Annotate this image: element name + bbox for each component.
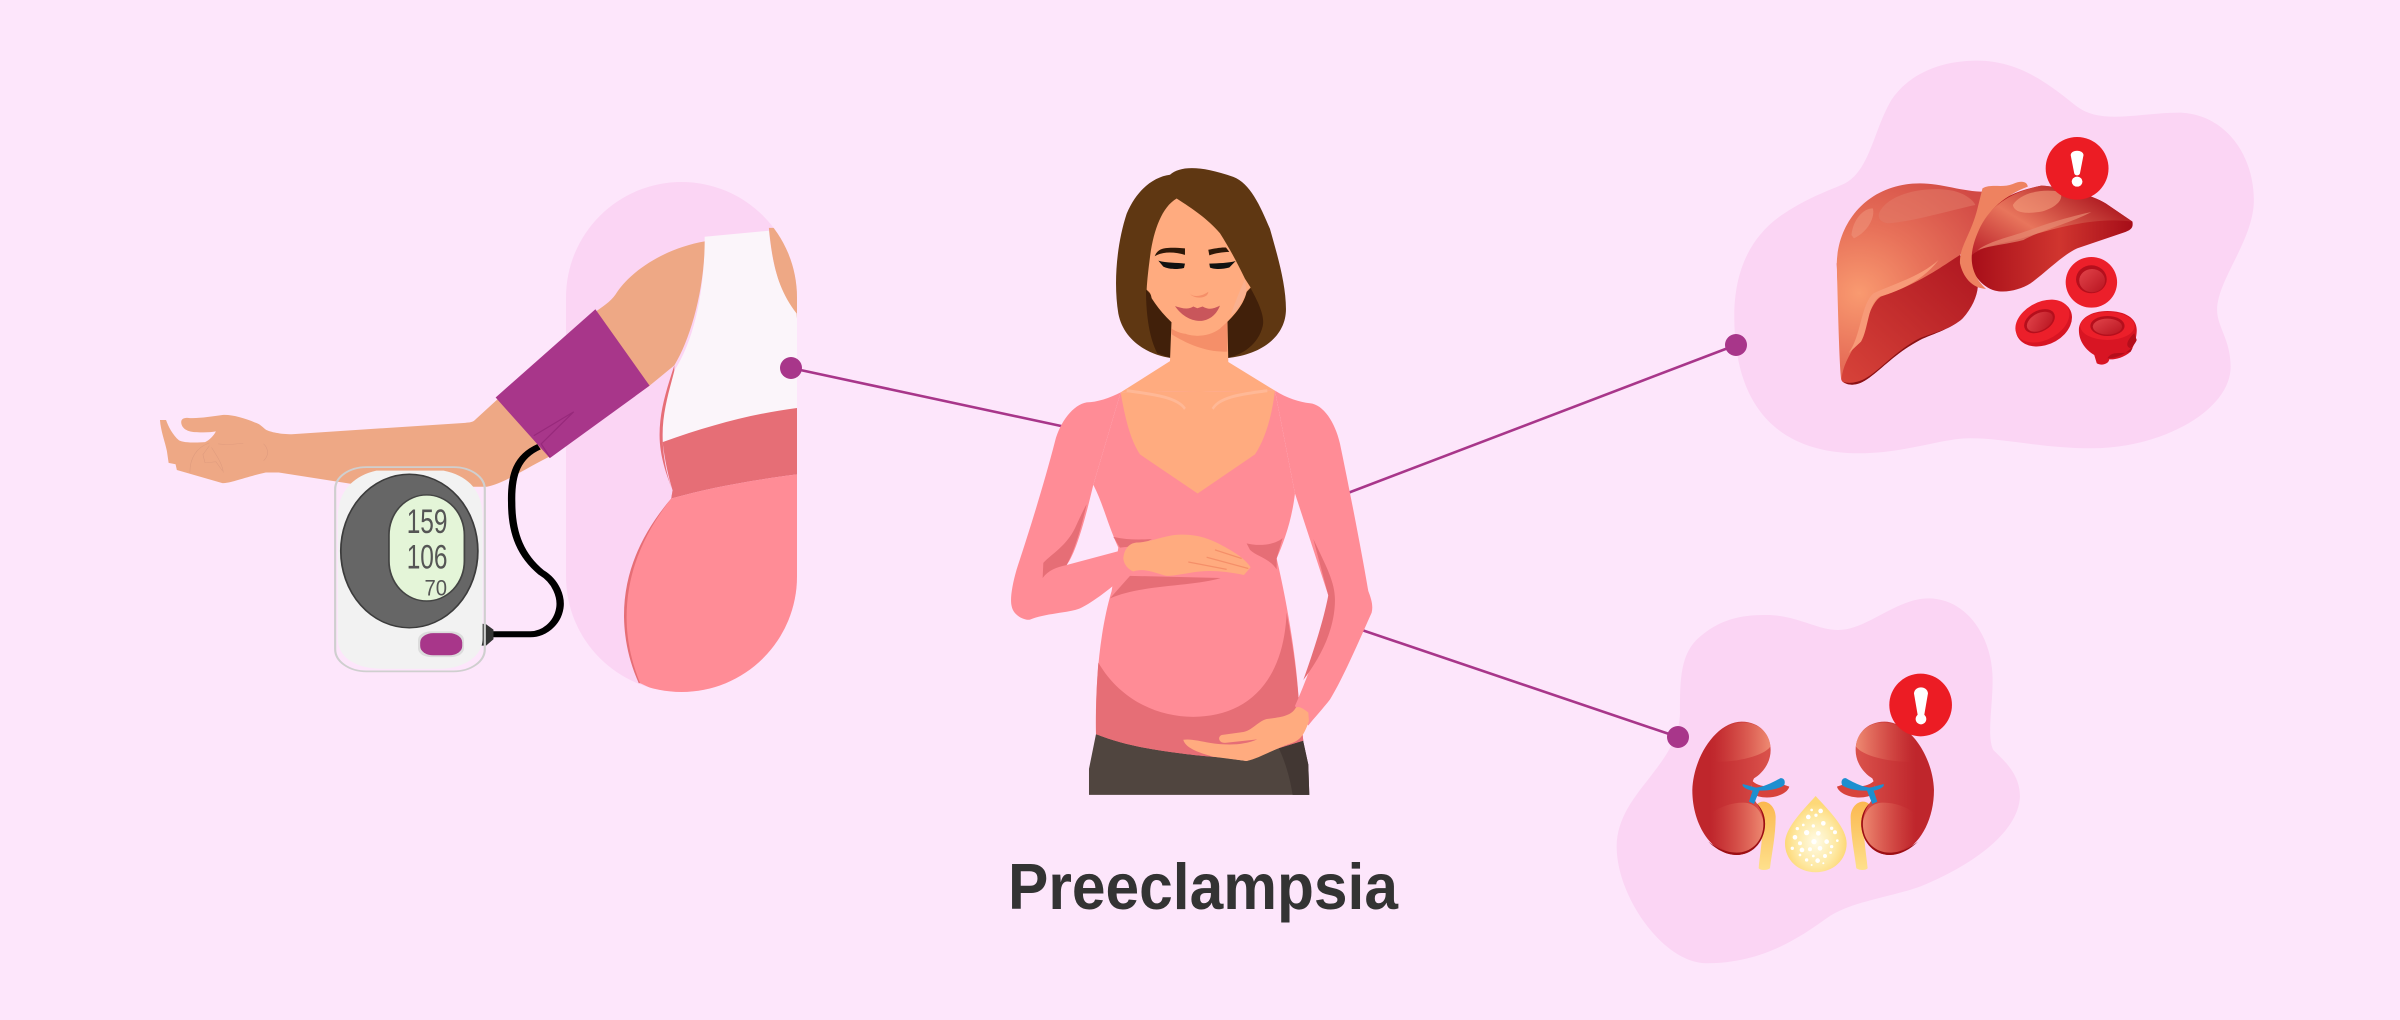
right lobe: [1969, 186, 2133, 292]
cable: [487, 447, 560, 634]
left lobe lower: [1837, 255, 1978, 385]
left arm crease: [1043, 504, 1087, 578]
eye right: [1209, 261, 1236, 269]
reading: systolic: 159: [407, 503, 447, 540]
icon: urine drop with protein: [1785, 796, 1847, 872]
belly: [627, 474, 804, 703]
title: Preeclampsia: [1008, 850, 1399, 923]
torso: [1093, 391, 1303, 758]
ligament: [1960, 182, 2028, 289]
monitor body: [335, 467, 485, 671]
kidney edge: [1708, 803, 1765, 855]
lips: [1175, 306, 1220, 321]
connector: [473, 624, 493, 646]
reading: diastolic: 106: [407, 538, 447, 576]
illustration: arm with cuff and monitor: [160, 241, 705, 671]
left lobe upper: [1837, 183, 1984, 380]
hand creases: [190, 443, 268, 472]
pants shade: [1278, 739, 1309, 795]
icon: alert: [2046, 137, 2109, 200]
brows: [1155, 248, 1185, 256]
white top: [663, 231, 804, 442]
vein: [1743, 778, 1785, 804]
upper hand: [1123, 535, 1251, 576]
dot: blood pressure: [780, 357, 802, 379]
kidney body: [1692, 722, 1771, 855]
monitor button: [418, 631, 464, 657]
collarbones: [1127, 391, 1267, 409]
nose: [1189, 292, 1208, 298]
dot: kidney: [1667, 726, 1689, 748]
skin at shoulder: [768, 228, 797, 318]
chest skin: [1121, 391, 1275, 493]
hand shadow: [1110, 576, 1221, 598]
icon: red blood cell top: [2066, 257, 2117, 308]
monitor screen: [389, 495, 464, 601]
kidney lobe top: [1715, 723, 1770, 762]
face: [1147, 199, 1251, 336]
hair shadow left: [1146, 290, 1172, 358]
torso in pill: [624, 228, 804, 703]
cuff fold: [534, 412, 574, 457]
waist band: [663, 407, 804, 499]
pants: [1089, 734, 1309, 795]
hair shadow right: [1227, 288, 1263, 358]
icon: alert: [1889, 674, 1952, 736]
icon: right kidney: [1837, 722, 1934, 870]
right arm crease: [1303, 539, 1335, 680]
panel: blood pressure pill background: [566, 182, 797, 692]
icon: red blood cell left: [2006, 290, 2081, 356]
reading: pulse: 70: [425, 576, 447, 601]
lobe highlights: [1879, 189, 1975, 223]
neck shadow: [1172, 320, 1227, 352]
illustration: pregnant woman: [1011, 168, 1372, 795]
neck: [1121, 313, 1275, 392]
dot: liver: [1725, 334, 1747, 356]
kidney lobe bottom: [1712, 803, 1764, 854]
breast shade right: [1247, 538, 1283, 569]
icon: left kidney: [1692, 722, 1789, 870]
artery: [1752, 780, 1789, 798]
belly edge: [624, 366, 674, 684]
right arm: [1275, 391, 1372, 725]
monitor face: [338, 471, 483, 669]
ureter: [1757, 802, 1776, 870]
panel: kidney blob: [1617, 598, 2020, 963]
lower hand: [1183, 707, 1309, 761]
icon: ruptured blood cell: [2079, 311, 2137, 365]
eye left: [1158, 261, 1185, 269]
left arm: [1011, 392, 1127, 620]
finger lines: [1188, 550, 1248, 569]
belly shade: [1096, 613, 1303, 758]
right cheek shade: [1231, 280, 1247, 316]
monitor dial: [341, 474, 478, 628]
infographic canvas: [160, 60, 2254, 964]
breast shade left: [1113, 537, 1152, 548]
connector lines: [791, 345, 1736, 737]
icon: liver: [1837, 182, 2133, 385]
cuff: [496, 309, 650, 458]
hair: [1116, 168, 1286, 358]
panel: liver blob: [1734, 61, 2254, 453]
right lobe upper: [1970, 186, 2132, 257]
arm: [160, 241, 705, 487]
